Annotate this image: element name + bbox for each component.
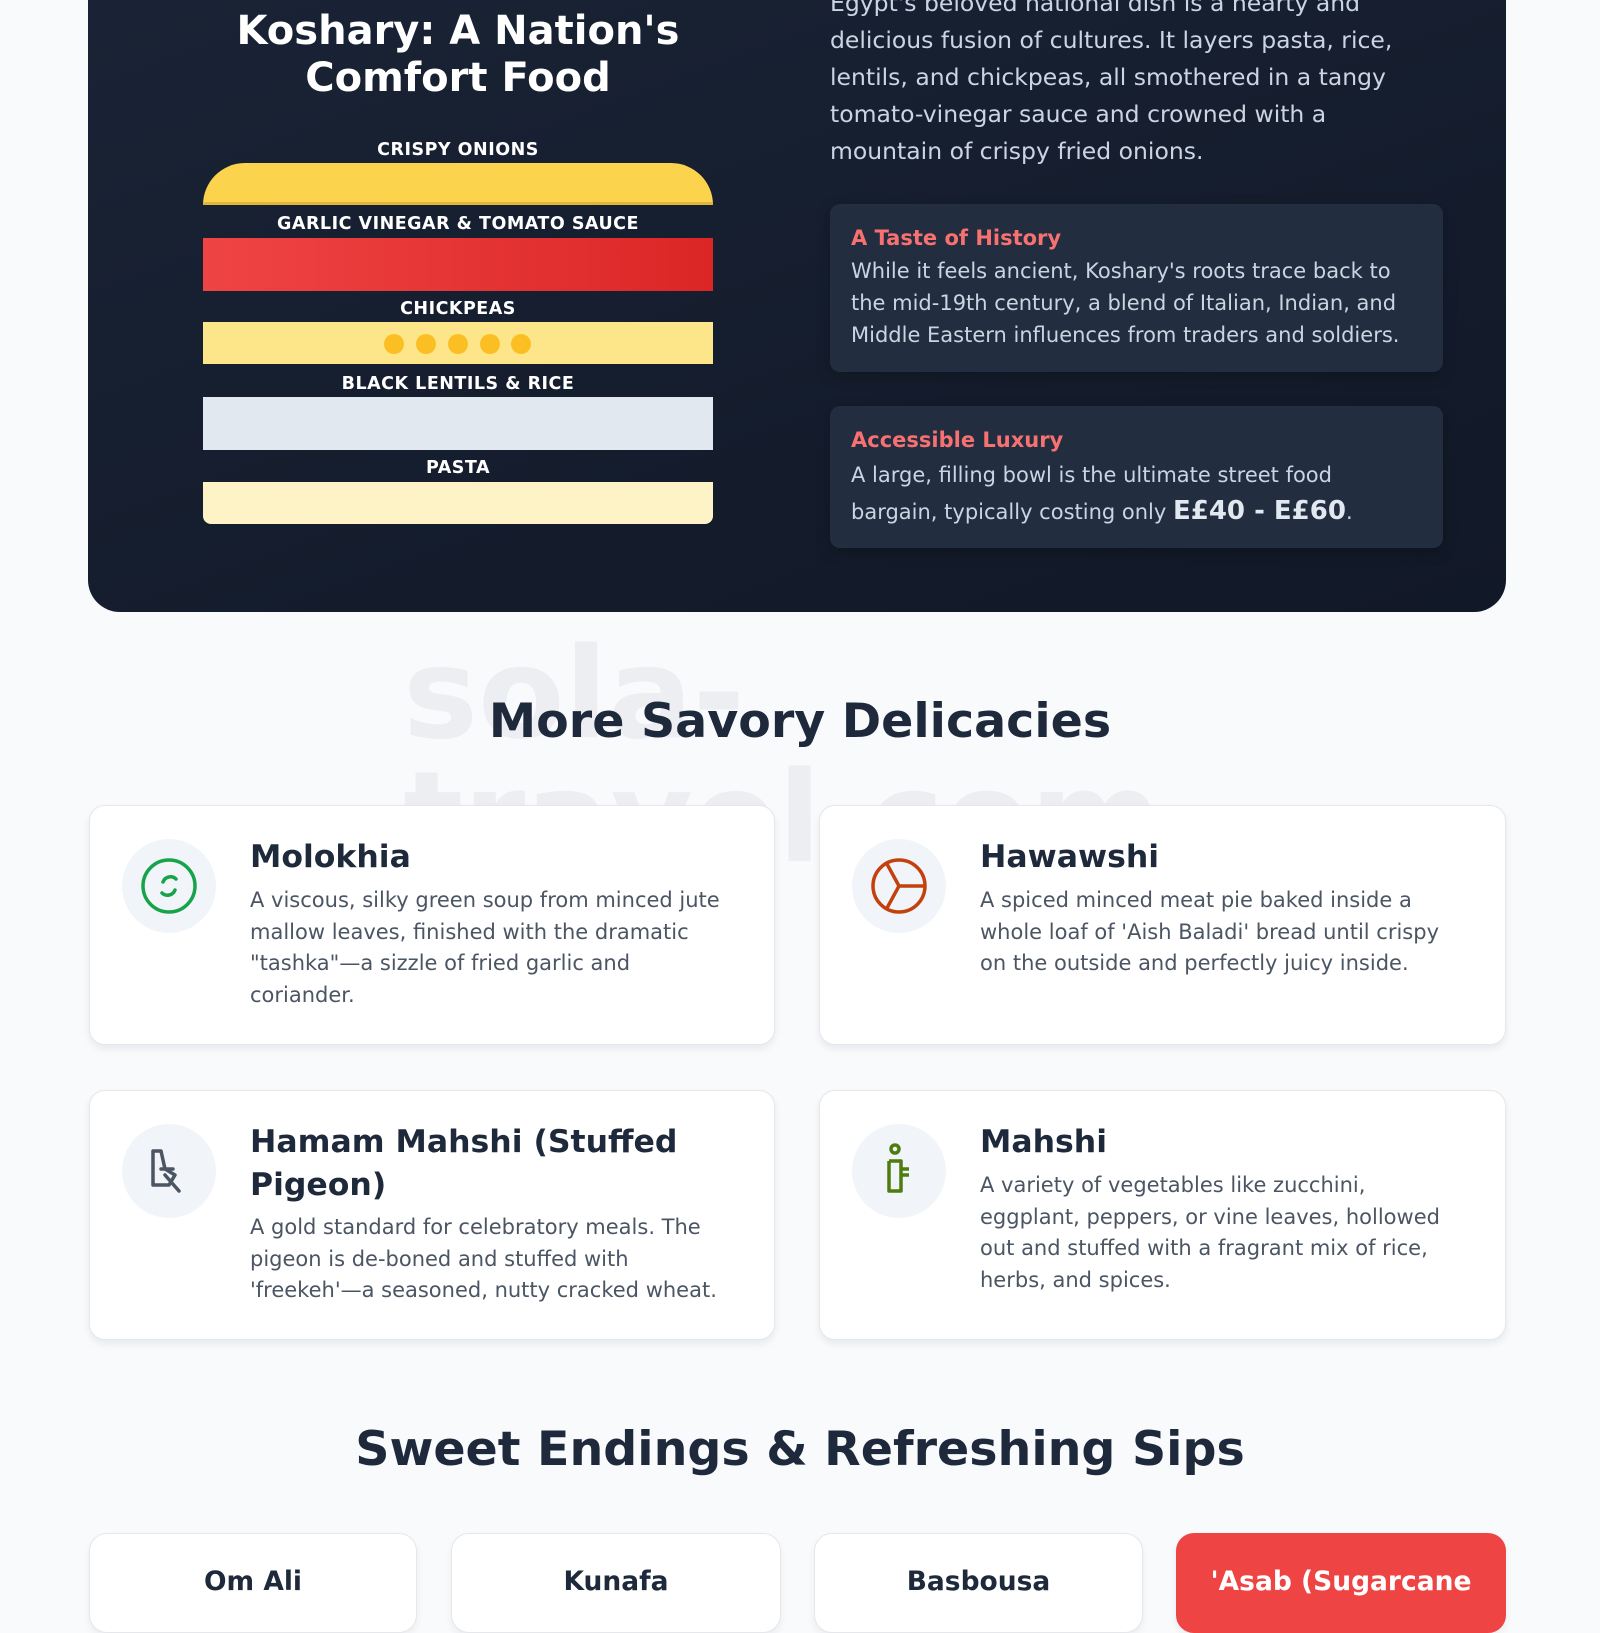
desc: A spiced minced meat pie baked inside a [980,888,1412,912]
title: koshary: Comfort Food [305,55,611,101]
panel: koshary hero [88,0,1506,612]
box title: A Taste of History [851,226,1061,250]
layer: onions [203,163,713,205]
card: asab [1176,1533,1506,1633]
intro text [830,0,1392,165]
layer label: pasta: PASTA [426,458,490,478]
desc: herbs, and spices. [980,1268,1171,1292]
desc [250,1215,717,1302]
title [250,1124,677,1203]
card: om ali [89,1533,417,1633]
box: history [830,204,1443,372]
layer label: chickpeas: CHICKPEAS [400,299,516,319]
layer label: lentils: BLACK LENTILS & RICE [342,374,574,394]
desc: A variety of vegetables like zucchini, [980,1173,1365,1197]
watermark: travel.com [403,744,1162,891]
desc: "tashka"—a sizzle of fried garlic and [250,951,630,975]
box body: A large, filling bowl is the ultimate street food [851,463,1332,487]
icon: vegetable [852,1124,946,1218]
desc: eggplant, peppers, or vine leaves, hollowed [980,1205,1440,1229]
box body: While it feels ancient, Koshary's roots trace back to [851,259,1391,283]
box body: bargain, typically costing only E£40 - E£60. [851,496,1353,526]
heading: sweets: Sweet Endings & Refreshing Sips [355,1422,1245,1477]
desc [980,1173,1440,1292]
desc: mallow leaves, finished with the dramatic [250,920,689,944]
title: koshary: Koshary: A Nation's [237,8,679,54]
layer: sauce [203,238,713,291]
card: kunafa: Kunafa [563,1566,669,1597]
box body: Middle Eastern influences from traders and soldiers. [851,323,1399,347]
icon: soup [122,839,216,933]
layer label: sauce: GARLIC VINEGAR & TOMATO SAUCE [277,214,639,234]
title: koshary [237,8,679,101]
desc: A viscous, silky green soup from minced jute [250,888,720,912]
box: luxury [830,406,1443,548]
card: hawawshi [819,805,1506,1045]
layer: chickpeas [203,322,713,364]
title: Hamam Mahshi (Stuffed [250,1124,677,1160]
intro text: mountain of crispy fried onions. [830,137,1203,165]
watermark: sola- [403,620,745,767]
card: basbousa: Basbousa [907,1566,1050,1597]
box body [851,463,1353,526]
card: molokhia [89,805,775,1045]
card: mahshi [819,1090,1506,1340]
card: hamam mahshi [89,1090,775,1340]
layer: lentils [203,397,713,450]
box title: Accessible Luxury [851,428,1063,452]
card: basbousa [814,1533,1143,1633]
desc: A gold standard for celebratory meals. The [250,1215,701,1239]
intro text: tomato-vinegar sauce and crowned with a [830,100,1326,128]
desc: 'freekeh'—a seasoned, nutty cracked wheat. [250,1278,717,1302]
card: kunafa [451,1533,781,1633]
desc: pigeon is de-boned and stuffed with [250,1247,629,1271]
intro text: delicious fusion of cultures. It layers pasta, rice, [830,26,1392,54]
desc [250,888,720,1007]
box body [851,259,1399,347]
layer: pasta [203,482,713,524]
card: asab: 'Asab (Sugarcane [1211,1566,1471,1597]
box body: the mid-19th century, a blend of Italian, Indian, and [851,291,1396,315]
watermark [403,620,1162,891]
desc: out and stuffed with a fragrant mix of rice, [980,1236,1428,1260]
intro text: lentils, and chickpeas, all smothered in a tangy [830,63,1386,91]
icon: pie [852,839,946,933]
title: Mahshi [980,1124,1107,1160]
desc: whole loaf of 'Aish Baladi' bread until crispy [980,920,1439,944]
heading: savory: More Savory Delicacies [489,694,1111,749]
title: Molokhia [250,839,411,875]
layer label: crispy onions: CRISPY ONIONS [377,140,539,160]
desc: on the outside and perfectly juicy inside. [980,951,1409,975]
desc [980,888,1439,975]
desc: coriander. [250,983,355,1007]
title: Hawawshi [980,839,1159,875]
icon: bird [122,1124,216,1218]
title: Pigeon) [250,1167,386,1203]
card: om ali: Om Ali [204,1566,302,1597]
